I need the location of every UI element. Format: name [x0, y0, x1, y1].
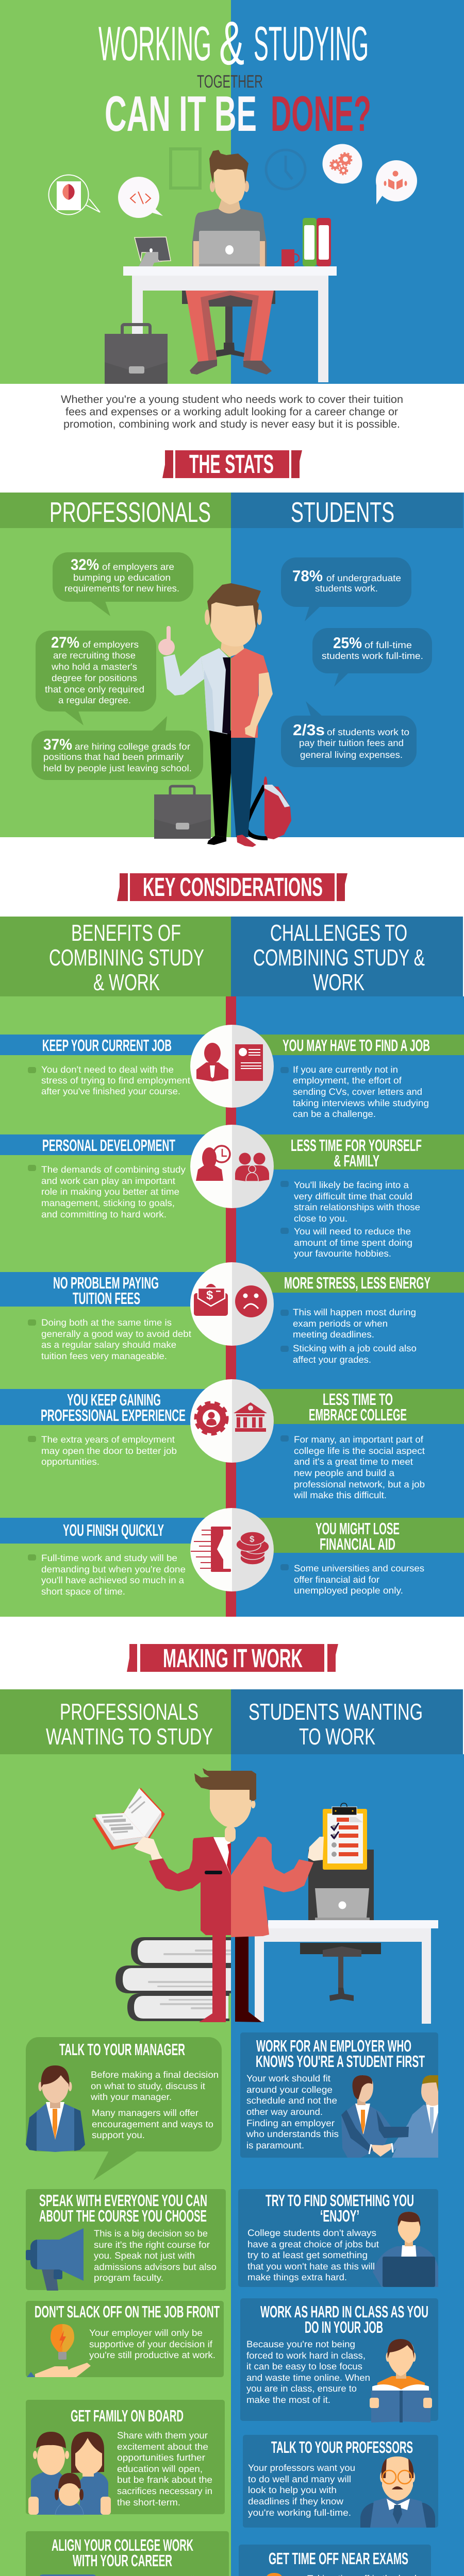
text block: challenge: and it's a great time to meet	[294, 1456, 413, 1467]
text block: challenge: You will need to reduce the	[294, 1226, 411, 1236]
icon: light bulb in hand	[27, 2324, 91, 2377]
heading: you might lose financial aid: FINANCIAL AID	[320, 1535, 395, 1553]
row: finish quickly	[0, 1508, 464, 1597]
card: talk to your professors	[243, 2435, 438, 2528]
title: working and studying	[98, 9, 369, 78]
illustration: desk	[123, 266, 337, 382]
text block: benefit: The demands of combining study	[41, 1164, 186, 1175]
text block: challenge: Sticking with a job could also	[293, 1343, 417, 1353]
callout: 25 percent: 25%	[333, 635, 362, 652]
icon: reader bubble	[376, 160, 417, 205]
text block: challenge: If you are currently not in	[293, 1064, 398, 1075]
card: work for an employer: is paramount.	[246, 2140, 304, 2150]
card: work as hard in class: Because you're not being	[246, 2339, 355, 2349]
callout: 37 percent: 37%	[43, 736, 72, 753]
icon: megaphone	[26, 2228, 84, 2291]
card: work for an employer: around your college	[246, 2084, 333, 2095]
row: professional experience	[0, 1379, 464, 1500]
icon: monitor	[135, 237, 171, 266]
text block: challenge: You'll likely be facing into a	[294, 1180, 409, 1190]
callout: 27 percent: that once only required	[45, 684, 144, 694]
heading banner: the stats	[162, 449, 302, 479]
heading: professionals wanting to study: WANTING TO STUDY	[46, 1723, 213, 1750]
callout: 27 percent: degree for positions	[52, 673, 137, 683]
card: speak with everyone: admissions advisors but also	[94, 2262, 217, 2272]
illustration: half student half professional	[92, 1768, 324, 2022]
heading: no problem paying tuition fees	[53, 1274, 159, 1308]
icon: circle with time and family icons	[190, 1125, 274, 1208]
heading: personal development: PERSONAL DEVELOPMENT	[42, 1136, 175, 1155]
illustration: desk and laptop	[255, 1850, 438, 2024]
text block: benefit	[28, 1064, 190, 1096]
illustration: chair	[182, 291, 275, 357]
panel: hero header	[0, 0, 464, 384]
heading: you keep gaining professional experience: PROFESSIONAL EXPERIENCE	[41, 1406, 186, 1425]
callout: 25 percent: students work full-time.	[322, 651, 423, 661]
callout: two thirds	[281, 701, 417, 767]
heading: you keep gaining professional experience	[41, 1391, 186, 1425]
text block: benefit	[28, 1553, 186, 1597]
card: get family on board	[26, 2400, 225, 2515]
card: try to find something: make things extra hard.	[247, 2272, 347, 2282]
card: speak with everyone: sure it's the right course for	[94, 2240, 210, 2250]
text block: benefit: stress of trying to find employment	[41, 1075, 190, 1086]
icon: faint picture frame	[171, 149, 200, 188]
callout: 37 percent: positions that had been primarily	[43, 752, 184, 762]
card: don't slack off: DON'T SLACK OFF ON THE JOB FRONT	[35, 2302, 220, 2321]
card: work as hard in class: make the most of it.	[246, 2395, 330, 2405]
callout: two thirds: 2/3s	[293, 722, 325, 739]
callout: 27 percent	[36, 631, 156, 725]
card: work as hard in class	[240, 2298, 438, 2422]
illustration: trousers	[186, 291, 274, 375]
panel: benefits and challenges	[0, 917, 464, 1617]
text block: challenge: strain relationships with those	[294, 1202, 420, 1212]
text block: benefit: role in making you better at time	[41, 1187, 179, 1197]
illustration: stacked books	[115, 1937, 231, 2021]
heading: professionals wanting to study	[46, 1699, 213, 1750]
heading: less time for yourself and family: & FAMILY	[334, 1151, 379, 1170]
card: talk to your professors: Your professors want you	[248, 2463, 355, 2473]
card: align your college work: WITH YOUR CAREER	[73, 2551, 172, 2570]
text block: introduction	[61, 394, 403, 430]
heading: students wanting to work	[248, 1699, 423, 1750]
text block: challenge: amount of time spent doing	[294, 1238, 412, 1248]
card: work for an employer: Finding an employer	[246, 2118, 335, 2128]
card: talk to your professors: deadlines if they know	[248, 2496, 344, 2506]
title: working and studying: WORKING	[98, 16, 211, 71]
icon: manager portrait	[26, 2065, 85, 2152]
callout: 37 percent	[31, 716, 203, 780]
text block: challenge: close to you.	[294, 1213, 347, 1224]
icon: handshake	[341, 2075, 438, 2158]
card: align your college work: ALIGN YOUR COLLEGE WORK	[52, 2536, 193, 2554]
card: try to find something: that you won't hate as this will	[247, 2261, 375, 2272]
text block: introduction: Whether you're a young student who needs work to cover their tuition	[61, 394, 403, 405]
card: work for an employer: other way around.	[246, 2107, 323, 2117]
heading: you finish quickly: YOU FINISH QUICKLY	[63, 1521, 164, 1539]
heading banner: making it work: MAKING IT WORK	[163, 1643, 303, 1673]
card: work as hard in class: and waste time online. When	[246, 2372, 370, 2383]
card: work for an employer	[240, 2032, 438, 2158]
text block: challenge: Some universities and courses	[294, 1563, 424, 1573]
card: speak with everyone: This is a big decision so be	[94, 2228, 208, 2239]
card: get family on board: opportunities further	[117, 2452, 205, 2463]
icon: professor	[360, 2456, 435, 2528]
heading: challenges	[253, 920, 425, 995]
heading: you keep gaining professional experience: YOU KEEP GAINING	[67, 1391, 161, 1409]
text block: challenge: employment, the effort of	[293, 1075, 402, 1086]
card: talk to your professors: to do well and many will	[248, 2474, 351, 2484]
heading: students: STUDENTS	[291, 496, 394, 528]
row: keep your current job	[0, 1025, 464, 1119]
icon: open book	[92, 1788, 165, 1850]
card: don't slack off: supportive of your decision if	[89, 2339, 213, 2349]
icon: circle with money and sad face	[190, 1262, 274, 1346]
icon: student reading	[370, 2339, 432, 2422]
text block: Before making a final decision	[91, 2070, 219, 2080]
title: can it be done: CAN IT BE	[105, 86, 257, 142]
icon: binders	[303, 218, 331, 266]
text block: challenge: your favourite hobbies.	[294, 1248, 391, 1259]
text block: challenge: meeting deadlines.	[293, 1329, 374, 1340]
card: try to find something: try to at least get something	[247, 2250, 368, 2260]
text block: benefit: demanding but when you're done	[41, 1564, 186, 1574]
heading: no problem paying tuition fees: NO PROBLEM PAYING	[53, 1274, 159, 1292]
text block: challenge: college life is the social aspect	[294, 1446, 425, 1456]
card: align your college work	[26, 2531, 229, 2576]
text block: challenge	[280, 1064, 429, 1119]
card: speak with everyone: you. Speak not just with	[94, 2250, 195, 2261]
callout: 78 percent: students work.	[315, 583, 378, 594]
panel: making it work	[0, 1689, 464, 2576]
card: work for an employer: Your work should fit	[246, 2073, 330, 2083]
text block: challenge: taking interviews while studying	[293, 1098, 429, 1108]
heading: you might lose financial aid	[316, 1519, 400, 1553]
text block: benefit: and work can play an important	[41, 1176, 175, 1186]
card: don't slack off: you're still productive at work.	[89, 2350, 216, 2360]
icon: faint clock	[266, 150, 305, 189]
heading: less time for yourself and family	[291, 1136, 422, 1170]
text block: benefit: tuition fees very manageable.	[41, 1351, 167, 1361]
text block: challenge	[280, 1180, 420, 1259]
text block: benefit: generally a good way to avoid debt	[41, 1329, 191, 1339]
illustration: shirt	[192, 209, 267, 266]
text block: with your manager.	[90, 2092, 172, 2102]
heading: benefits: COMBINING STUDY	[49, 944, 204, 971]
card: try to find something	[238, 2189, 438, 2287]
text block: introduction: promotion, combining work and study is never easy but it is possible.	[63, 418, 400, 430]
text block: benefit	[28, 1434, 177, 1467]
callout: two thirds: pay their tuition fees and	[299, 738, 404, 748]
card: try to find something: have a great choice of jobs but	[247, 2239, 379, 2249]
text block: challenge: This will happen most during	[293, 1307, 416, 1317]
card: work as hard in class: forced to work hard in class,	[246, 2350, 366, 2361]
illustration: hair and face	[209, 150, 249, 215]
callout: 27 percent: 27%	[51, 634, 79, 651]
card: speak with everyone	[26, 2189, 226, 2291]
text block: benefit: opportunities.	[41, 1456, 100, 1467]
text block: benefit: you'll have achieved so much in a	[41, 1575, 185, 1585]
row: tuition fees	[0, 1262, 464, 1365]
card: speak with everyone: SPEAK WITH EVERYONE YOU CAN	[39, 2191, 207, 2210]
callout: 37 percent: held by people just leaving school.	[43, 763, 192, 773]
callout: 32 percent: of employers are	[102, 562, 174, 572]
heading: benefits: BENEFITS OF	[71, 920, 181, 946]
icon: exam clipboard	[244, 2573, 304, 2576]
heading: benefits	[49, 920, 204, 995]
callout: two thirds: of students work to	[327, 727, 409, 737]
text block: benefit: may open the door to better job	[41, 1446, 177, 1456]
subtitle: together: TOGETHER	[197, 72, 263, 92]
icon: student with laptop	[373, 2212, 438, 2287]
text block: benefit: management, sticking to goals,	[41, 1198, 175, 1208]
text block: challenge: affect your grades.	[293, 1354, 371, 1365]
heading banner: key considerations	[117, 872, 347, 902]
card: talk to your manager	[26, 2037, 222, 2180]
icon: checklist window	[40, 2574, 96, 2576]
text block: challenge: exam periods or when	[293, 1318, 388, 1329]
icon: mug	[281, 249, 299, 266]
heading: benefits: & WORK	[93, 969, 160, 995]
callout: 32 percent	[53, 552, 193, 616]
icon: gears bubble	[323, 144, 362, 183]
callout: 27 percent: of employers	[82, 639, 139, 650]
panel: stats	[0, 493, 464, 839]
card: get family on board: education will open,	[117, 2464, 203, 2474]
heading: less time to embrace college: LESS TIME TO	[323, 1390, 393, 1409]
icon: circle with hourglass and coins	[190, 1508, 274, 1591]
text block: challenge	[280, 1563, 424, 1596]
card: work as hard in class: you are in class, ensure to	[246, 2383, 357, 2394]
text block: benefit: and committing to hard work.	[41, 1209, 167, 1219]
text block: challenge: will make this difficult.	[293, 1490, 387, 1500]
text block: support you.	[92, 2130, 145, 2140]
heading: students wanting to work: TO WORK	[299, 1723, 375, 1750]
text block: benefit: short space of time.	[41, 1586, 125, 1597]
text block: benefit	[28, 1317, 191, 1361]
callout: 78 percent: of undergraduate	[326, 573, 401, 583]
icon: briefcase	[154, 786, 211, 839]
text block: challenge: very difficult time that could	[294, 1191, 412, 1201]
card: get family on board: GET FAMILY ON BOARD	[71, 2406, 184, 2425]
text block: challenge: offer financial aid for	[294, 1574, 379, 1585]
heading: less time to embrace college	[309, 1390, 407, 1424]
text block: challenge	[280, 1434, 425, 1500]
heading: challenges: CHALLENGES TO	[270, 920, 407, 946]
text block: benefit: as a regular salary should make	[41, 1340, 176, 1350]
card: get time off near exams	[239, 2545, 431, 2576]
card: talk to your professors: look to help you with	[248, 2485, 337, 2495]
heading banner: the stats: THE STATS	[189, 449, 274, 479]
text block: introduction: fees and expenses or a working adult looking for a career change or	[65, 406, 398, 418]
title: working and studying: &	[219, 9, 244, 78]
card: speak with everyone: ABOUT THE COURSE YOU CHOOSE	[39, 2207, 207, 2225]
card: work as hard in class: it can be easy to lose focus	[246, 2361, 362, 2371]
card: talk to your professors: you're working full-time.	[248, 2507, 351, 2518]
callout: 27 percent: are recruiting those	[53, 650, 136, 660]
card: get family on board: the short-term.	[117, 2497, 180, 2507]
icon: circle with job icons	[190, 1025, 274, 1108]
callout: 78 percent	[281, 557, 411, 621]
icon: briefcase	[105, 325, 168, 384]
callout: 37 percent: are hiring college grads for	[75, 741, 190, 752]
card: get family on board: Share with them your	[117, 2430, 208, 2441]
text block: challenge: can be a challenge.	[293, 1109, 376, 1119]
callout: 27 percent: a regular degree.	[58, 695, 131, 705]
callout: 27 percent: who hold a master's	[51, 662, 137, 672]
icon: circle with money and sad face: $	[206, 1289, 213, 1302]
heading banner: key considerations: KEY CONSIDERATIONS	[143, 872, 323, 902]
text block: challenge: unemployed people only.	[294, 1585, 403, 1596]
text block: challenge	[280, 1307, 417, 1365]
callout: two thirds: general living expenses.	[300, 750, 403, 760]
text block: challenge: professional network, but a job	[294, 1479, 425, 1489]
text block: on what to study, discuss it	[91, 2081, 205, 2091]
heading: professionals wanting to study: PROFESSIONALS	[60, 1699, 198, 1725]
text block: benefit: Full-time work and study will be	[41, 1553, 177, 1563]
illustration: half professional half student	[158, 583, 273, 847]
icon: circle with gear and college	[190, 1379, 274, 1463]
callout: 32 percent: bumping up education	[73, 572, 171, 583]
card: get family on board: sacrifices necessary in	[117, 2486, 212, 2496]
icon: circle with hourglass and coins: $	[250, 1534, 255, 1544]
heading: challenges: WORK	[313, 969, 364, 995]
heading banner: making it work	[127, 1643, 338, 1673]
text block: benefit	[28, 1164, 186, 1219]
text block: benefit: after you've finished your course.	[41, 1086, 180, 1096]
card: get family on board: excitement about the	[117, 2442, 208, 2452]
text block: benefit: The extra years of employment	[41, 1434, 175, 1445]
text block: challenge: For many, an important part of	[294, 1434, 424, 1445]
card: try to find something: ‘ENJOY’	[320, 2207, 359, 2225]
card: speak with everyone: program faculty.	[94, 2273, 163, 2283]
illustration: clipboard	[323, 1803, 367, 1870]
row: personal development	[0, 1125, 464, 1259]
card: don't slack off	[26, 2301, 224, 2377]
callout: 25 percent: of full-time	[364, 640, 412, 650]
callout: 32 percent: requirements for new hires.	[64, 583, 179, 594]
illustration: person at desk	[105, 150, 337, 384]
icon: code bubble	[118, 177, 163, 218]
icon: family	[28, 2432, 111, 2515]
card: work for an employer: schedule and not the	[246, 2095, 337, 2106]
text block: benefit: Doing both at the same time is	[41, 1317, 172, 1328]
icon: laptop	[199, 231, 260, 266]
card: talk to your manager: TALK TO YOUR MANAGER	[59, 2040, 185, 2059]
text block: challenge: new people and build a	[294, 1468, 395, 1478]
callout: 78 percent: 78%	[292, 568, 323, 585]
text block: encouragement and ways to	[92, 2119, 213, 2129]
text block: benefit: You don't need to deal with the	[41, 1064, 174, 1075]
card: try to find something: College students don't always	[247, 2228, 376, 2238]
card: work for an employer: who understands this	[246, 2129, 339, 2139]
heading: no problem paying tuition fees: TUITION FEES	[73, 1289, 140, 1308]
text block: Many managers will offer	[92, 2108, 198, 2118]
icon: backpack	[246, 776, 291, 839]
heading: keep your current job: KEEP YOUR CURRENT JOB	[42, 1036, 172, 1055]
title: can it be done: DONE?	[271, 86, 371, 142]
card: get family on board: but be frank about the	[117, 2475, 212, 2485]
text block	[90, 2070, 219, 2140]
callout: 25 percent	[312, 628, 432, 687]
icon: pie chart bubble	[48, 175, 100, 214]
callout: 32 percent: 32%	[71, 556, 99, 573]
heading: you might lose financial aid: YOU MIGHT LOSE	[316, 1519, 400, 1538]
card: don't slack off: Your employer will only be	[89, 2328, 203, 2338]
heading: professionals: PROFESSIONALS	[49, 496, 211, 528]
card: work as hard in class: DO IN YOUR JOB	[305, 2318, 383, 2336]
text block: challenge: sending CVs, cover letters and	[293, 1087, 422, 1097]
